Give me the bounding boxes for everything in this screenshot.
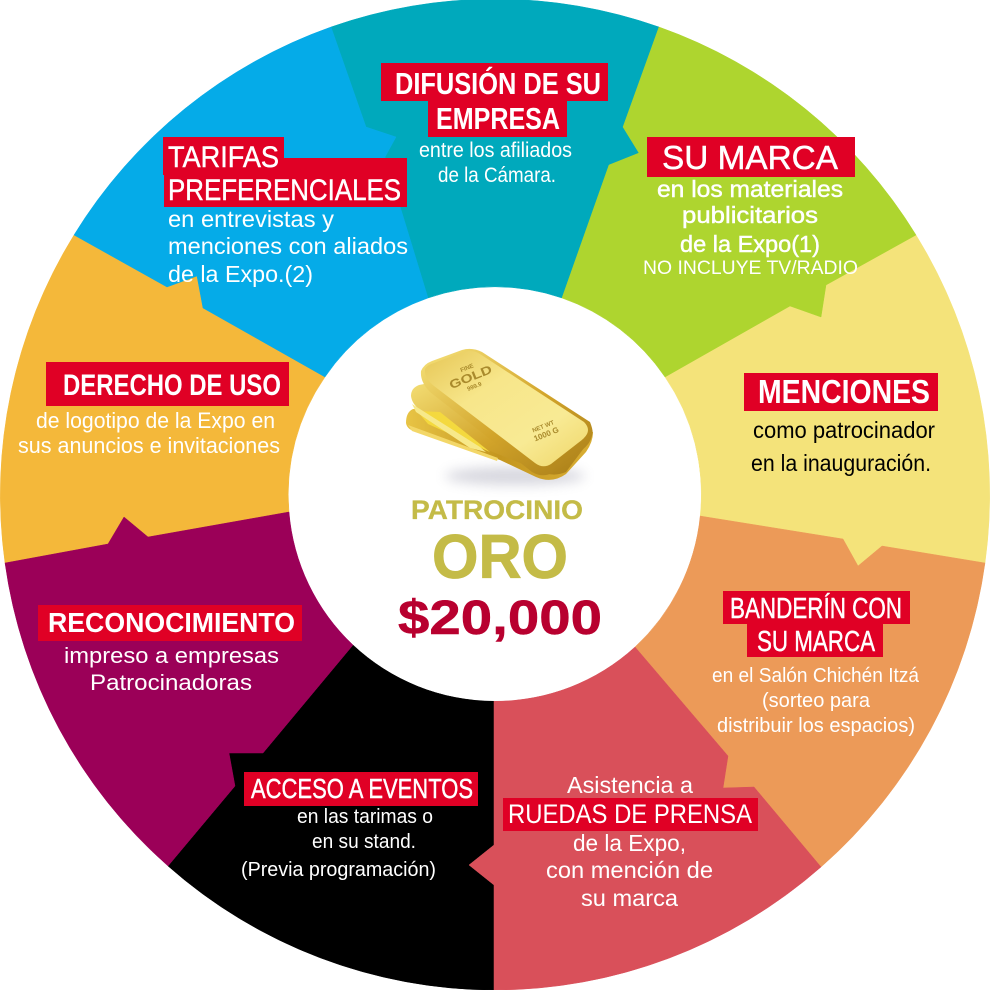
panel: banderín con su marca: BANDERÍN CON	[730, 592, 902, 625]
panel: tarifas preferenciales: en entrevistas y	[168, 206, 334, 232]
panel: difusión de su empresa: entre los afiliados	[419, 138, 572, 162]
price: $20,000	[398, 592, 602, 645]
panel: acceso a eventos: ACCESO A EVENTOS	[251, 773, 473, 804]
icon: gold bars	[406, 349, 593, 485]
panel: tarifas preferenciales: menciones con aliados	[168, 233, 408, 259]
panel: su marca: de la Expo(1)	[680, 231, 820, 257]
panel: difusión de su empresa: de la Cámara.	[438, 163, 556, 187]
panel: reconocimiento: Patrocinadoras	[90, 670, 252, 695]
center circle	[289, 289, 701, 701]
panel: menciones	[665, 235, 990, 566]
panel: menciones: en la inauguración.	[751, 450, 931, 476]
bar engraving: gold	[445, 357, 497, 398]
panel: menciones: como patrocinador	[753, 417, 935, 443]
panel: reconocimiento	[5, 512, 353, 866]
heading: patrocinio: PATROCINIO	[411, 495, 583, 525]
heading: oro: ORO	[432, 523, 568, 592]
panel: tarifas preferenciales: PREFERENCIALES	[168, 174, 401, 207]
bar engraving: gold: 999.9	[467, 381, 483, 393]
panel: acceso a eventos: (Previa programación)	[241, 858, 436, 881]
panel: ruedas de prensa	[469, 647, 821, 990]
panel: su marca: SU MARCA	[662, 139, 838, 176]
panel: su marca: en los materiales	[657, 176, 843, 202]
panel: ruedas de prensa: su marca	[581, 885, 679, 911]
panel: acceso a eventos: en su stand.	[312, 830, 416, 853]
bar engraving: gold: FINE	[460, 363, 475, 374]
bar engraving: weight: 1000 G	[532, 425, 560, 443]
panel: derecho de uso: sus anuncios e invitaciones	[18, 433, 280, 458]
panel: tarifas preferenciales: de la Expo.(2)	[168, 261, 313, 287]
panel: su marca: publicitarios	[682, 202, 818, 228]
panel: difusión de su empresa: DIFUSIÓN DE SU	[395, 65, 601, 101]
panel: banderín con su marca: SU MARCA	[757, 626, 876, 658]
panel: difusión de su empresa	[331, 0, 659, 298]
panel: su marca	[562, 27, 916, 377]
bar engraving: gold: GOLD	[447, 362, 495, 392]
panel: ruedas de prensa: de la Expo,	[573, 830, 686, 856]
panel: reconocimiento: RECONOCIMIENTO	[48, 607, 295, 638]
panel: acceso a eventos: en las tarimas o	[297, 805, 433, 828]
panel: acceso a eventos	[168, 645, 494, 990]
panel: reconocimiento: impreso a empresas	[64, 643, 279, 668]
panel: tarifas preferenciales	[74, 27, 428, 377]
panel: ruedas de prensa: RUEDAS DE PRENSA	[508, 799, 752, 829]
bar engraving: weight: NET WT	[532, 420, 556, 434]
panel: menciones: MENCIONES	[758, 373, 930, 410]
panel: ruedas de prensa: con mención de	[546, 857, 713, 883]
panel: difusión de su empresa: EMPRESA	[436, 101, 560, 136]
panel: banderín con su marca: en el Salón Chichén Itzá	[712, 664, 920, 687]
panel: derecho de uso: de logotipo de la Expo en	[36, 408, 275, 433]
panel: derecho de uso	[0, 235, 325, 563]
panel: banderín con su marca: (sorteo para	[762, 689, 871, 712]
panel: banderín con su marca	[635, 516, 985, 867]
panel: derecho de uso: DERECHO DE USO	[63, 369, 281, 402]
panel: su marca: NO INCLUYE TV/RADIO	[643, 258, 858, 279]
panel: tarifas preferenciales: TARIFAS	[168, 141, 279, 174]
panel: banderín con su marca: distribuir los espacios)	[717, 714, 915, 737]
panel: ruedas de prensa: Asistencia a	[567, 772, 694, 798]
